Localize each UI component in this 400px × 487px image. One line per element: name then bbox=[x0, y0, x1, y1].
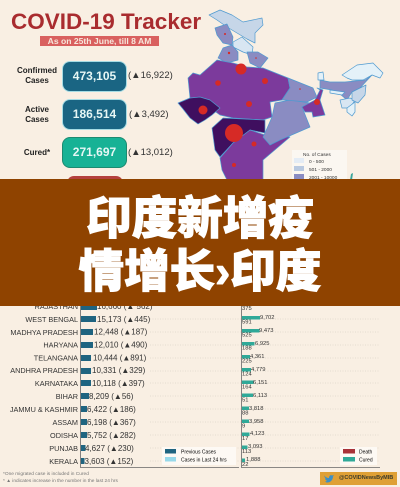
cured and death values: 22 bbox=[242, 462, 248, 468]
northern states bbox=[209, 10, 268, 68]
state labels: WEST BENGAL bbox=[25, 315, 78, 324]
stat: active cases: Cases bbox=[25, 115, 49, 124]
map of India bbox=[178, 10, 384, 180]
gridlines bbox=[150, 319, 380, 461]
state bar charts bbox=[10, 302, 380, 468]
confirmed case values: 8,209 (▲56) bbox=[89, 392, 134, 401]
confirmed case values: 3,603 (▲152) bbox=[84, 457, 134, 466]
icon: bird bbox=[324, 475, 334, 482]
legend: number of cases: 0 - 500 bbox=[309, 159, 324, 165]
confirmed case values: 15,173 (▲445) bbox=[97, 315, 151, 324]
case circles bbox=[198, 33, 320, 167]
legend: death and cured: Death bbox=[359, 450, 373, 456]
state labels: ANDHRA PRADESH bbox=[10, 366, 78, 375]
footnotes: *One migrated case is included in Cured bbox=[3, 472, 89, 477]
stat: deaths bbox=[67, 176, 123, 205]
state labels: PUNJAB bbox=[49, 444, 78, 453]
confirmed case values: 6,198 (▲367) bbox=[87, 418, 136, 427]
chart axes bbox=[80, 305, 380, 468]
cured and death values bbox=[242, 306, 275, 468]
cured and death values: 9 bbox=[242, 424, 245, 430]
state labels: KARNATAKA bbox=[35, 379, 78, 388]
state labels: ASSAM bbox=[52, 418, 78, 427]
confirmed case values: 10,331 (▲329) bbox=[92, 366, 146, 375]
stat: active cases: 186,514 bbox=[73, 107, 116, 121]
stat: confirmed cases: Confirmed bbox=[17, 66, 57, 75]
cured and death values: 3,818 bbox=[249, 406, 264, 412]
cured and death values: 6,925 bbox=[255, 341, 270, 347]
cured and death values: 225 bbox=[242, 358, 252, 364]
confirmed case values: 10,118 (▲397) bbox=[92, 379, 145, 388]
cured and death values: 188 bbox=[242, 346, 252, 352]
twitter handle badge bbox=[320, 472, 397, 485]
stat: confirmed cases: 473,105 bbox=[73, 69, 116, 83]
legend: previous cases bbox=[162, 447, 236, 465]
legend: death and cured bbox=[340, 447, 377, 465]
cured and death values: 3,093 bbox=[248, 444, 263, 450]
state labels: BIHAR bbox=[56, 392, 78, 401]
cured and death values: 4,779 bbox=[251, 367, 266, 373]
confirmed case values: 10,444 (▲891) bbox=[93, 354, 147, 362]
cured and death values: 124 bbox=[242, 372, 252, 378]
stat: confirmed cases: Cases bbox=[25, 76, 49, 85]
island territory bbox=[350, 173, 353, 180]
footnotes: * ▲ indicates increase in the number in the last 24 hrs bbox=[3, 478, 118, 484]
north-eastern states bbox=[318, 63, 383, 116]
cured and death values: 164 bbox=[242, 384, 252, 390]
cured bars bbox=[242, 316, 260, 462]
cured and death values: 6,151 bbox=[253, 380, 268, 386]
stat: confirmed cases: (▲16,922) bbox=[128, 70, 173, 81]
confirmed case values: 4,627 (▲230) bbox=[85, 444, 134, 453]
western and central states bbox=[178, 60, 290, 180]
legend: death and cured: Cured bbox=[359, 458, 373, 464]
state labels: HARYANA bbox=[43, 340, 78, 350]
cured and death values: 113 bbox=[242, 449, 251, 455]
stat: active cases bbox=[25, 99, 169, 130]
headline banner bbox=[0, 179, 400, 306]
cured and death values: 9,473 bbox=[259, 328, 274, 334]
state labels: KERALA bbox=[49, 457, 78, 466]
date subtitle: As on 25th June, till 8 AM bbox=[48, 36, 151, 46]
confirmed case values: 16,660 (▲ 562) bbox=[97, 302, 153, 311]
stat: cured bbox=[24, 137, 173, 168]
stat: confirmed cases bbox=[17, 61, 173, 92]
cured and death values: 591 bbox=[242, 320, 252, 326]
stat: active cases: Active bbox=[25, 105, 49, 114]
headline line 1: 印度新增疫 bbox=[86, 193, 314, 244]
legend: previous cases: Cases in Last 24 hrs bbox=[181, 458, 227, 464]
cured and death values: 1,888 bbox=[246, 457, 261, 463]
title: COVID-19 Tracker bbox=[11, 9, 201, 34]
stat: cured: Cured* bbox=[24, 148, 50, 157]
confirmed case values: 6,422 (▲186) bbox=[87, 405, 136, 414]
stat: cured: 271,697 bbox=[73, 145, 116, 159]
confirmed case bars bbox=[81, 303, 97, 464]
confirmed case values: 5,752 (▲282) bbox=[87, 431, 136, 440]
cured and death values: 6,113 bbox=[253, 393, 267, 399]
stat: cured: (▲13,012) bbox=[128, 147, 173, 158]
legend: number of cases bbox=[292, 150, 347, 181]
legend: previous cases: Previous Cases bbox=[181, 450, 217, 456]
legend: number of cases: 501 - 2000 bbox=[309, 167, 332, 173]
cured and death values: 51 bbox=[242, 398, 248, 404]
eastern states bbox=[263, 78, 325, 145]
handle text: @COVIDNewsByMIB bbox=[339, 475, 393, 481]
confirmed case values: 12,010 (▲490) bbox=[94, 340, 148, 350]
confirmed case values: 12,448 (▲187) bbox=[94, 328, 148, 336]
state labels: JAMMU & KASHMIR bbox=[10, 405, 78, 414]
cured and death values: 4,361 bbox=[250, 354, 265, 360]
state labels: RAJASTHAN bbox=[35, 302, 78, 311]
cured and death values: 88 bbox=[242, 410, 248, 416]
state labels: TELANGANA bbox=[34, 354, 78, 362]
legend: number of cases: No. of Cases bbox=[303, 152, 331, 158]
cured and death values: 525 bbox=[242, 332, 252, 338]
footnotes bbox=[3, 472, 118, 484]
cured and death values: 9,702 bbox=[260, 315, 275, 321]
state labels: MADHYA PRADESH bbox=[10, 328, 78, 337]
cured and death values: 17 bbox=[242, 436, 248, 442]
confirmed case values bbox=[84, 302, 153, 466]
state labels: ODISHA bbox=[50, 431, 78, 440]
cured and death values: 4,123 bbox=[250, 431, 265, 437]
headline line 2: 情增长›印度 bbox=[79, 246, 321, 297]
stat: active cases: (▲3,492) bbox=[129, 109, 169, 120]
cured and death values: 3,958 bbox=[249, 419, 264, 425]
state labels bbox=[10, 302, 78, 466]
cured and death values: 375 bbox=[242, 306, 252, 312]
